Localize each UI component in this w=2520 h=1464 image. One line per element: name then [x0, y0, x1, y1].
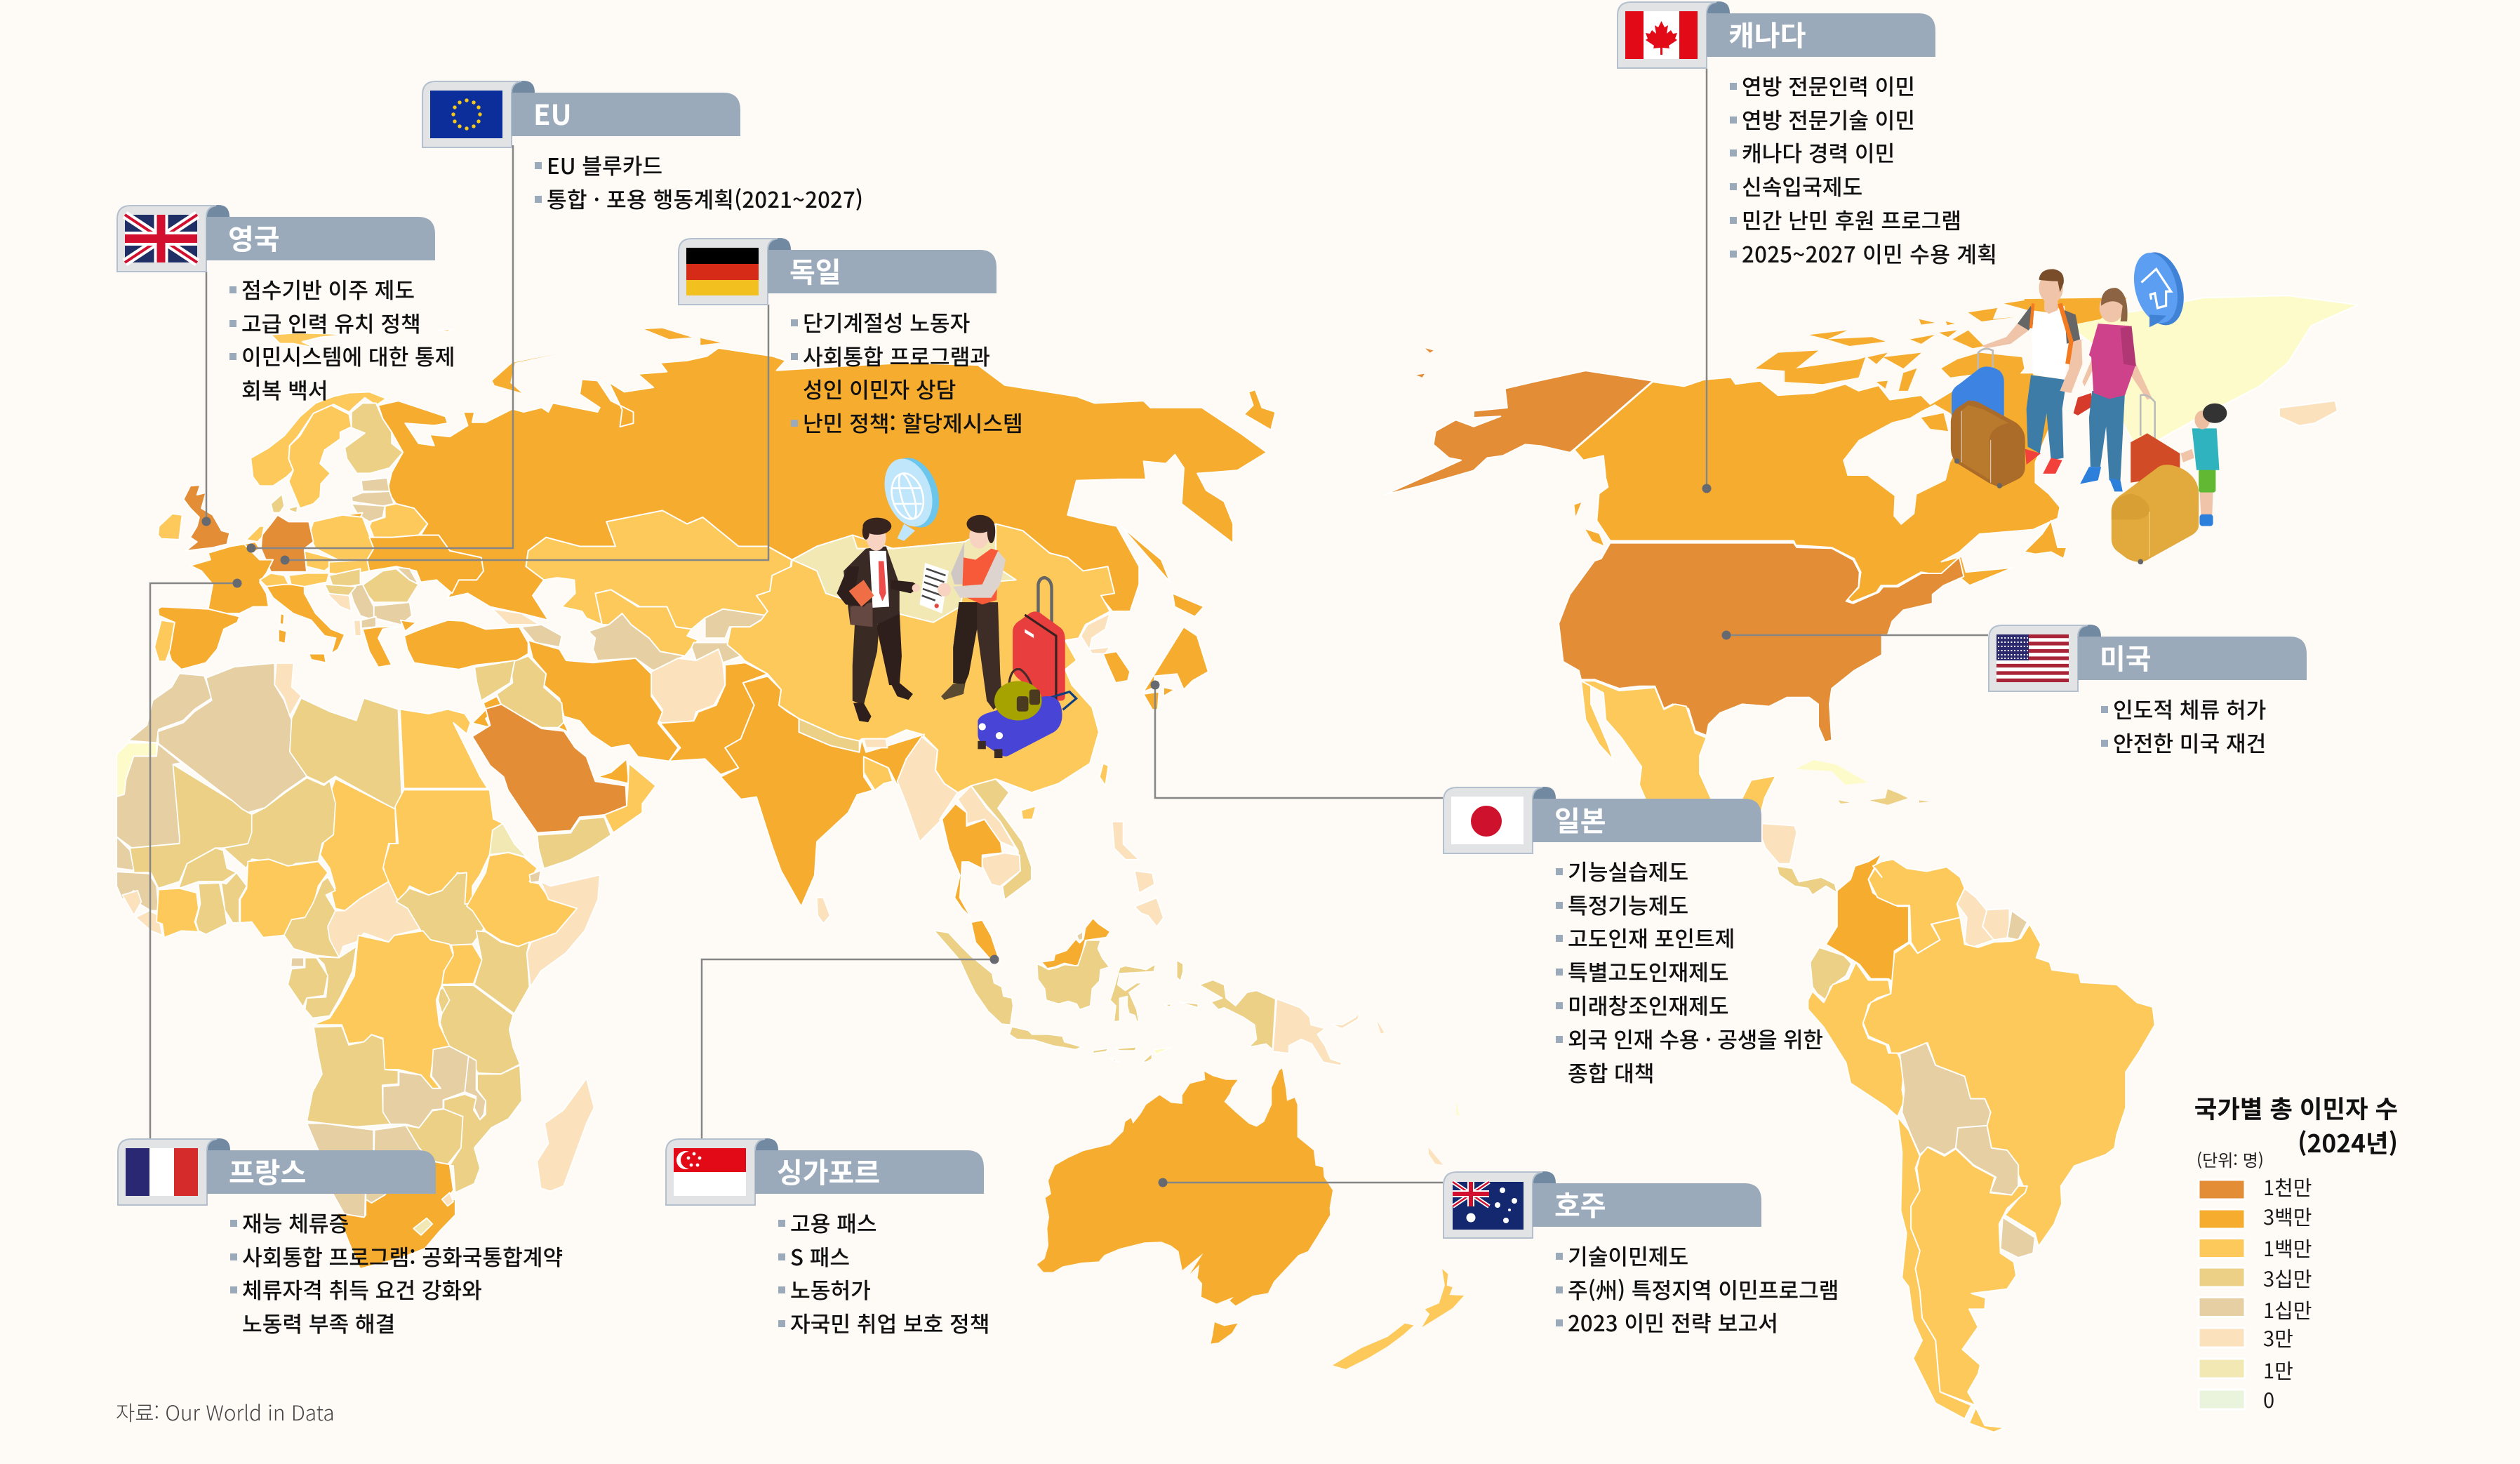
legend item: 1천만: 1천만 [2263, 1172, 2312, 1202]
list: Canada policies: 2025~2027 이민 수용 계획 [1742, 237, 1997, 269]
list: Singapore policies: 고용 패스 [790, 1206, 877, 1238]
map region: East and Southeast Asia [817, 390, 1275, 963]
list: Canada policies: 캐나다 경력 이민 [1742, 136, 1895, 168]
list: Germany policies: 사회통합 프로그램과 [803, 340, 990, 371]
list: USA policies: 인도적 체류 허가 [2113, 693, 2266, 724]
list: UK policies: 고급 인력 유치 정책 [241, 307, 421, 338]
heading: Singapore: 싱가포르 [777, 1150, 880, 1191]
list: Singapore policies: 노동허가 [790, 1273, 871, 1305]
legend item: 1만 [2199, 1355, 2293, 1385]
list: Australia policies: 주(州) 특정지역 이민프로그램 [1568, 1273, 1839, 1305]
heading: Canada: 캐나다 [1728, 13, 1806, 54]
list: Australia policies [1556, 1239, 1839, 1338]
flag: Australia [1453, 1182, 1524, 1230]
list: UK policies [229, 273, 455, 405]
legend item: 3백만 [2199, 1202, 2312, 1231]
legend item: 1만: 1만 [2263, 1355, 2293, 1385]
list: Canada policies: 연방 전문인력 이민 [1742, 69, 1915, 101]
list: Singapore policies [778, 1206, 989, 1338]
legend item: 1천만 [2199, 1172, 2312, 1202]
list: Japan policies: 특정기능제도 [1568, 889, 1688, 920]
legend item: 0: 0 [2263, 1385, 2274, 1414]
icon: red suitcase [2131, 395, 2180, 483]
leader lines with end dots [150, 69, 1988, 1187]
map region: Central and South America [1762, 823, 2155, 1432]
source note: 자료: Our World in Data [116, 1397, 335, 1427]
map region: Europe, Middle East and South Asia [154, 328, 1267, 907]
list: EU policies [535, 149, 863, 214]
list: USA policies: 안전한 미국 재건 [2113, 726, 2266, 758]
figure: woman in pink top [2074, 288, 2152, 491]
list: Singapore policies: 자국민 취업 보호 정책 [790, 1307, 989, 1338]
legend item: 1백만 [2199, 1233, 2312, 1263]
panel: USA [1989, 625, 2307, 758]
list: Singapore policies: S 패스 [790, 1240, 850, 1272]
list: France policies: 체류자격 취득 요건 강화와 [242, 1273, 482, 1305]
list: UK policies: 점수기반 이주 제도 [241, 273, 415, 305]
list: Germany policies [791, 306, 1023, 438]
icon: document [919, 563, 949, 613]
flag: EU [430, 91, 502, 138]
list: Germany policies: 난민 정책: 할당제시스템 [803, 406, 1023, 438]
legend item: 3백만: 3백만 [2263, 1202, 2312, 1231]
icon: yellow suitcase [2112, 465, 2199, 564]
list: Japan policies: 종합 대책 [1568, 1056, 1655, 1088]
list: Canada policies: 민간 난민 후원 프로그램 [1742, 204, 1961, 235]
list: Australia policies: 2023 이민 전략 보고서 [1568, 1306, 1778, 1338]
map region: Africa [116, 663, 600, 1269]
panel: Australia [1444, 1171, 1839, 1338]
legend [2194, 1090, 2398, 1414]
heading: France: 프랑스 [229, 1150, 306, 1191]
legend item: 0 [2199, 1385, 2274, 1414]
heading: Germany: 독일 [789, 250, 841, 291]
illustration: two businessmen with luggage [836, 451, 1076, 758]
figure: man with folder [836, 518, 920, 722]
list: France policies: 사회통합 프로그램: 공화국통합계약 [242, 1240, 563, 1272]
flag: Japan [1451, 797, 1524, 844]
list: Japan policies: 고도인재 포인트제 [1568, 921, 1735, 953]
list: Japan policies: 기능실습제도 [1568, 855, 1688, 886]
heading: Japan: 일본 [1554, 799, 1606, 839]
panel: France [118, 1138, 563, 1338]
list: France policies [230, 1206, 563, 1338]
list: France policies: 재능 체류증 [242, 1206, 349, 1238]
legend item: 1십만: 1십만 [2263, 1295, 2312, 1324]
flag: Canada [1625, 11, 1698, 59]
icon: home speech bubble [2127, 247, 2191, 331]
flag: Germany [686, 248, 759, 295]
legend item: 3십만: 3십만 [2263, 1263, 2312, 1293]
flag: France [126, 1148, 198, 1196]
map region: Indonesia, Oceania and Australia [934, 918, 1464, 1369]
heading: USA: 미국 [2100, 637, 2152, 677]
figure: man in white t-shirt [1982, 269, 2082, 474]
icon: green bag [994, 669, 1042, 721]
list: Japan policies: 특별고도인재제도 [1568, 955, 1729, 987]
icon: red suitcase [1013, 578, 1065, 700]
legend title: 국가별 총 이민자 수 [2194, 1090, 2398, 1126]
panel: UK [117, 205, 455, 405]
icon: globe speech bubble [876, 451, 947, 541]
map region: North America and Greenland [1385, 295, 2358, 816]
list: Japan policies: 미래창조인재제도 [1568, 989, 1729, 1020]
legend item: 3만 [2199, 1323, 2293, 1352]
heading: EU: EU [533, 93, 572, 133]
heading: UK: 영국 [228, 217, 280, 258]
list: Germany policies: 성인 이민자 상담 [803, 373, 956, 404]
legend item: 1십만 [2199, 1295, 2312, 1324]
list: EU policies: EU 블루카드 [547, 149, 662, 180]
list: Japan policies [1556, 855, 1823, 1088]
icon: blue suitcase [978, 692, 1076, 758]
illustration: migrant family with luggage [1951, 247, 2227, 564]
flag: USA [1996, 634, 2069, 682]
figure: man in orange vest [938, 515, 1006, 710]
flag: UK [125, 215, 197, 262]
list: Canada policies [1730, 69, 1997, 269]
legend title year: (2024년) [2298, 1124, 2398, 1160]
legend item: 1백만: 1백만 [2263, 1233, 2312, 1263]
list: Australia policies: 기술이민제도 [1568, 1239, 1688, 1271]
list: Japan policies: 외국 인재 수용 · 공생을 위한 [1568, 1023, 1823, 1054]
list: UK policies: 이민시스템에 대한 통제 [241, 340, 455, 371]
icon: blue suitcase [1952, 349, 2004, 418]
legend unit: (단위: 명) [2196, 1147, 2264, 1171]
list: UK policies: 회복 백서 [241, 373, 328, 405]
list: EU policies: 통합 · 포용 행동계획(2021~2027) [547, 182, 863, 214]
list: Canada policies: 신속입국제도 [1742, 170, 1862, 201]
panel: Canada [1618, 1, 1997, 269]
world map choropleth [116, 295, 2358, 1432]
list: Canada policies: 연방 전문기술 이민 [1742, 103, 1915, 135]
list: USA policies [2101, 693, 2266, 758]
list: France policies: 노동력 부족 해결 [242, 1307, 395, 1338]
panel: Japan [1444, 787, 1823, 1088]
figure: child [2181, 404, 2227, 526]
heading: Australia: 호주 [1554, 1183, 1606, 1224]
flag: Singapore [674, 1148, 746, 1196]
panel: Singapore [666, 1138, 989, 1338]
icon: brown suitcase [1951, 401, 2025, 488]
legend item: 3만: 3만 [2263, 1323, 2293, 1352]
legend item: 3십만 [2199, 1263, 2312, 1293]
list: Germany policies: 단기계절성 노동자 [803, 306, 970, 338]
panel: Germany [679, 238, 1023, 438]
panel: EU [422, 81, 863, 214]
